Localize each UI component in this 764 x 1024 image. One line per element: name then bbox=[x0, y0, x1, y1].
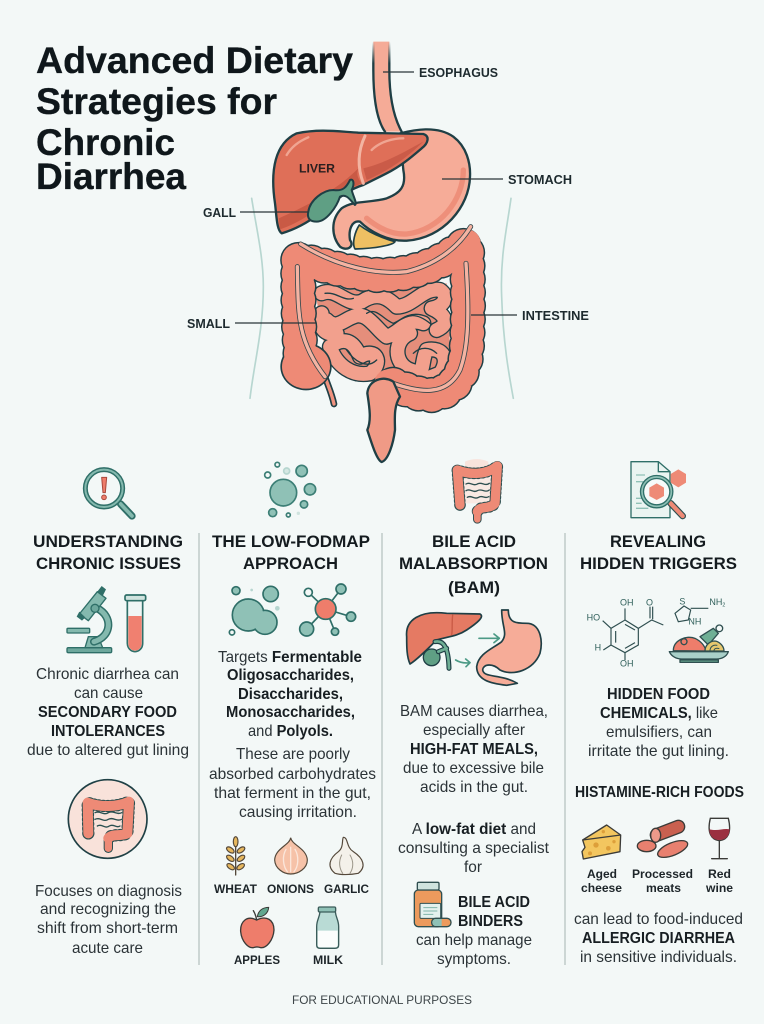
text: bam causes: acids in the gut. bbox=[420, 779, 528, 796]
text: focus on diagnosis: and recognizing the bbox=[40, 901, 176, 918]
food labels: Processed bbox=[632, 867, 693, 881]
icon: test tube bbox=[125, 595, 146, 652]
icon: cheese bbox=[582, 825, 621, 859]
heading: CHRONIC ISSUES bbox=[36, 554, 181, 573]
text: focus on diagnosis: shift from short-term bbox=[37, 920, 178, 937]
icon: pill bottle bbox=[414, 882, 451, 927]
text: fodmap definition: Monosaccharides, bbox=[226, 704, 355, 721]
text: bam causes: due to excessive bile bbox=[403, 760, 544, 777]
text: bam causes: especially after bbox=[423, 722, 525, 739]
heading bbox=[399, 532, 548, 597]
food labels: Red bbox=[708, 867, 731, 881]
text: explanation: These are poorly bbox=[236, 746, 350, 763]
text: fodmap definition: Targets Fermentable bbox=[218, 649, 362, 666]
panel: understanding chronic issues bbox=[27, 470, 189, 957]
small intestine bbox=[315, 283, 452, 383]
label: stomach: STOMACH bbox=[508, 173, 572, 187]
icon: plate of food bbox=[669, 625, 728, 662]
icon: mini intestine bbox=[457, 459, 497, 519]
food labels row two: APPLES bbox=[234, 953, 280, 967]
food labels row one bbox=[214, 882, 369, 896]
text: focus on diagnosis: acute care bbox=[72, 940, 143, 957]
food labels row one: ONIONS bbox=[267, 882, 314, 896]
title: Strategies for bbox=[36, 80, 277, 122]
subheading: histamine-rich foods: HISTAMINE-RICH FOODS bbox=[575, 784, 744, 801]
label: esophagus: ESOPHAGUS bbox=[419, 66, 498, 80]
rectum bbox=[367, 379, 400, 462]
text: fodmap definition: Oligosaccharides, bbox=[227, 667, 354, 684]
heading: APPROACH bbox=[243, 554, 338, 573]
label lines bbox=[235, 72, 517, 323]
chemical structures bbox=[587, 597, 725, 669]
title: Chronic bbox=[36, 121, 175, 163]
chemical structures: HO bbox=[587, 613, 600, 623]
body outline bbox=[250, 198, 513, 398]
icon: onion bbox=[275, 838, 307, 874]
text: allergic diarrhea: ALLERGIC DIARRHEA bbox=[582, 930, 735, 947]
panel: revealing hidden triggers bbox=[574, 462, 744, 966]
text: bam causes: HIGH-FAT MEALS, bbox=[410, 741, 538, 758]
icon: microscope bbox=[67, 586, 112, 653]
chemical structures: OH bbox=[620, 597, 633, 607]
heading bbox=[580, 532, 737, 573]
heading: THE LOW-FODMAP bbox=[212, 532, 370, 551]
icon: molecule network bbox=[300, 584, 356, 636]
heading: (BAM) bbox=[448, 578, 500, 597]
icon: carbohydrate molecules bbox=[229, 586, 280, 635]
text: bile acid binders: BILE ACID bbox=[458, 894, 530, 911]
liver label: LIVER bbox=[299, 161, 335, 175]
text: fodmap definition bbox=[218, 649, 362, 740]
icon: red wine bbox=[709, 818, 730, 859]
anatomy diagram bbox=[250, 42, 513, 462]
food labels bbox=[581, 867, 733, 895]
gallbladder bbox=[308, 180, 356, 222]
text: hidden food chemicals bbox=[588, 686, 729, 760]
appendix bbox=[325, 377, 334, 404]
large intestine bbox=[280, 227, 471, 395]
text: bile acid binders bbox=[416, 894, 532, 968]
text: explanation: that ferment in the gut, bbox=[214, 785, 371, 802]
title: Advanced Dietary bbox=[36, 39, 353, 81]
stomach bbox=[333, 129, 470, 249]
food labels: meats bbox=[646, 881, 681, 895]
chemical structures: NH bbox=[709, 597, 722, 607]
heading: UNDERSTANDING bbox=[33, 532, 183, 551]
heading bbox=[33, 532, 183, 573]
icon: intestine in circle bbox=[68, 780, 147, 858]
text: secondary intolerances bbox=[27, 666, 189, 759]
text: explanation: absorbed carbohydrates bbox=[209, 766, 376, 783]
icon: apple bbox=[241, 907, 274, 948]
food labels row two: MILK bbox=[313, 953, 343, 967]
title: Diarrhea bbox=[36, 155, 187, 197]
text: focus on diagnosis: Focuses on diagnosis bbox=[35, 883, 182, 900]
text: allergic diarrhea bbox=[574, 911, 743, 966]
icon: liver and stomach with arrows bbox=[407, 610, 541, 685]
esophagus bbox=[373, 42, 402, 132]
label: intestine: INTESTINE bbox=[522, 309, 589, 323]
text: explanation bbox=[209, 746, 376, 821]
text: secondary intolerances: Chronic diarrhea can bbox=[36, 666, 179, 683]
text: fodmap definition: Disaccharides, bbox=[238, 686, 343, 703]
text: hidden food chemicals: irritate the gut lining. bbox=[588, 743, 729, 760]
liver bbox=[273, 131, 428, 233]
text: hidden food chemicals: CHEMICALS, like bbox=[600, 705, 718, 722]
text: bam causes: BAM causes diarrhea, bbox=[400, 703, 548, 720]
text: allergic diarrhea: can lead to food-induced bbox=[574, 911, 743, 928]
text: bam causes bbox=[400, 703, 548, 796]
text: bile acid binders: symptoms. bbox=[437, 951, 511, 968]
icon: bubbles bbox=[265, 462, 316, 517]
food labels row two bbox=[234, 953, 343, 967]
text: bile acid binders: can help manage bbox=[416, 932, 532, 949]
food labels: cheese bbox=[581, 881, 622, 895]
heading: MALABSORPTION bbox=[399, 554, 548, 573]
label: gall: GALL bbox=[203, 206, 236, 220]
heading: BILE ACID bbox=[432, 532, 516, 551]
panel: the low-fodmap approach bbox=[209, 462, 376, 967]
chemical structures: S bbox=[679, 597, 685, 607]
heading bbox=[212, 532, 370, 573]
heading: HIDDEN TRIGGERS bbox=[580, 554, 737, 573]
chemical structures: OH bbox=[620, 659, 633, 669]
text: low-fat diet bbox=[398, 821, 550, 876]
text: bile acid binders: BINDERS bbox=[458, 913, 523, 930]
food labels: Aged bbox=[587, 867, 617, 881]
text: explanation: causing irritation. bbox=[239, 804, 357, 821]
text: low-fat diet: for bbox=[464, 859, 482, 876]
text: low-fat diet: consulting a specialist bbox=[398, 840, 550, 857]
text: secondary intolerances: due to altered gut lining bbox=[27, 742, 189, 759]
text: hidden food chemicals: emulsifiers, can bbox=[606, 724, 712, 741]
text: fodmap definition: and Polyols. bbox=[248, 723, 333, 740]
food labels row one: GARLIC bbox=[324, 882, 369, 896]
text: secondary intolerances: INTOLERANCES bbox=[51, 723, 165, 740]
text: low-fat diet: A low-fat diet and bbox=[412, 821, 536, 838]
pancreas bbox=[354, 225, 395, 249]
icon: garlic bbox=[330, 837, 363, 875]
title bbox=[36, 39, 353, 197]
text: secondary intolerances: can cause bbox=[74, 685, 143, 702]
icon: wheat bbox=[225, 837, 246, 875]
text: focus on diagnosis bbox=[35, 883, 182, 957]
icon: magnifier with alert bbox=[85, 470, 132, 516]
chemical structures: H bbox=[595, 643, 601, 653]
chemical structures: NH bbox=[688, 617, 701, 627]
text: secondary intolerances: SECONDARY FOOD bbox=[38, 704, 177, 721]
text: hidden food chemicals: HIDDEN FOOD bbox=[607, 686, 710, 703]
heading: REVEALING bbox=[610, 532, 706, 551]
label: small: SMALL bbox=[187, 317, 230, 331]
panel: bile acid malabsorption bbox=[398, 459, 550, 968]
chemical structures: O bbox=[646, 597, 653, 607]
footer: FOR EDUCATIONAL PURPOSES bbox=[292, 995, 472, 1007]
food labels row one: WHEAT bbox=[214, 882, 258, 896]
icon: milk bottle bbox=[317, 907, 339, 948]
text: allergic diarrhea: in sensitive individuals. bbox=[580, 949, 737, 966]
food labels: wine bbox=[705, 881, 733, 895]
icon: document with magnifier bbox=[631, 462, 686, 518]
chemical structures: 2 bbox=[722, 603, 725, 609]
icon: processed meats bbox=[637, 827, 690, 861]
